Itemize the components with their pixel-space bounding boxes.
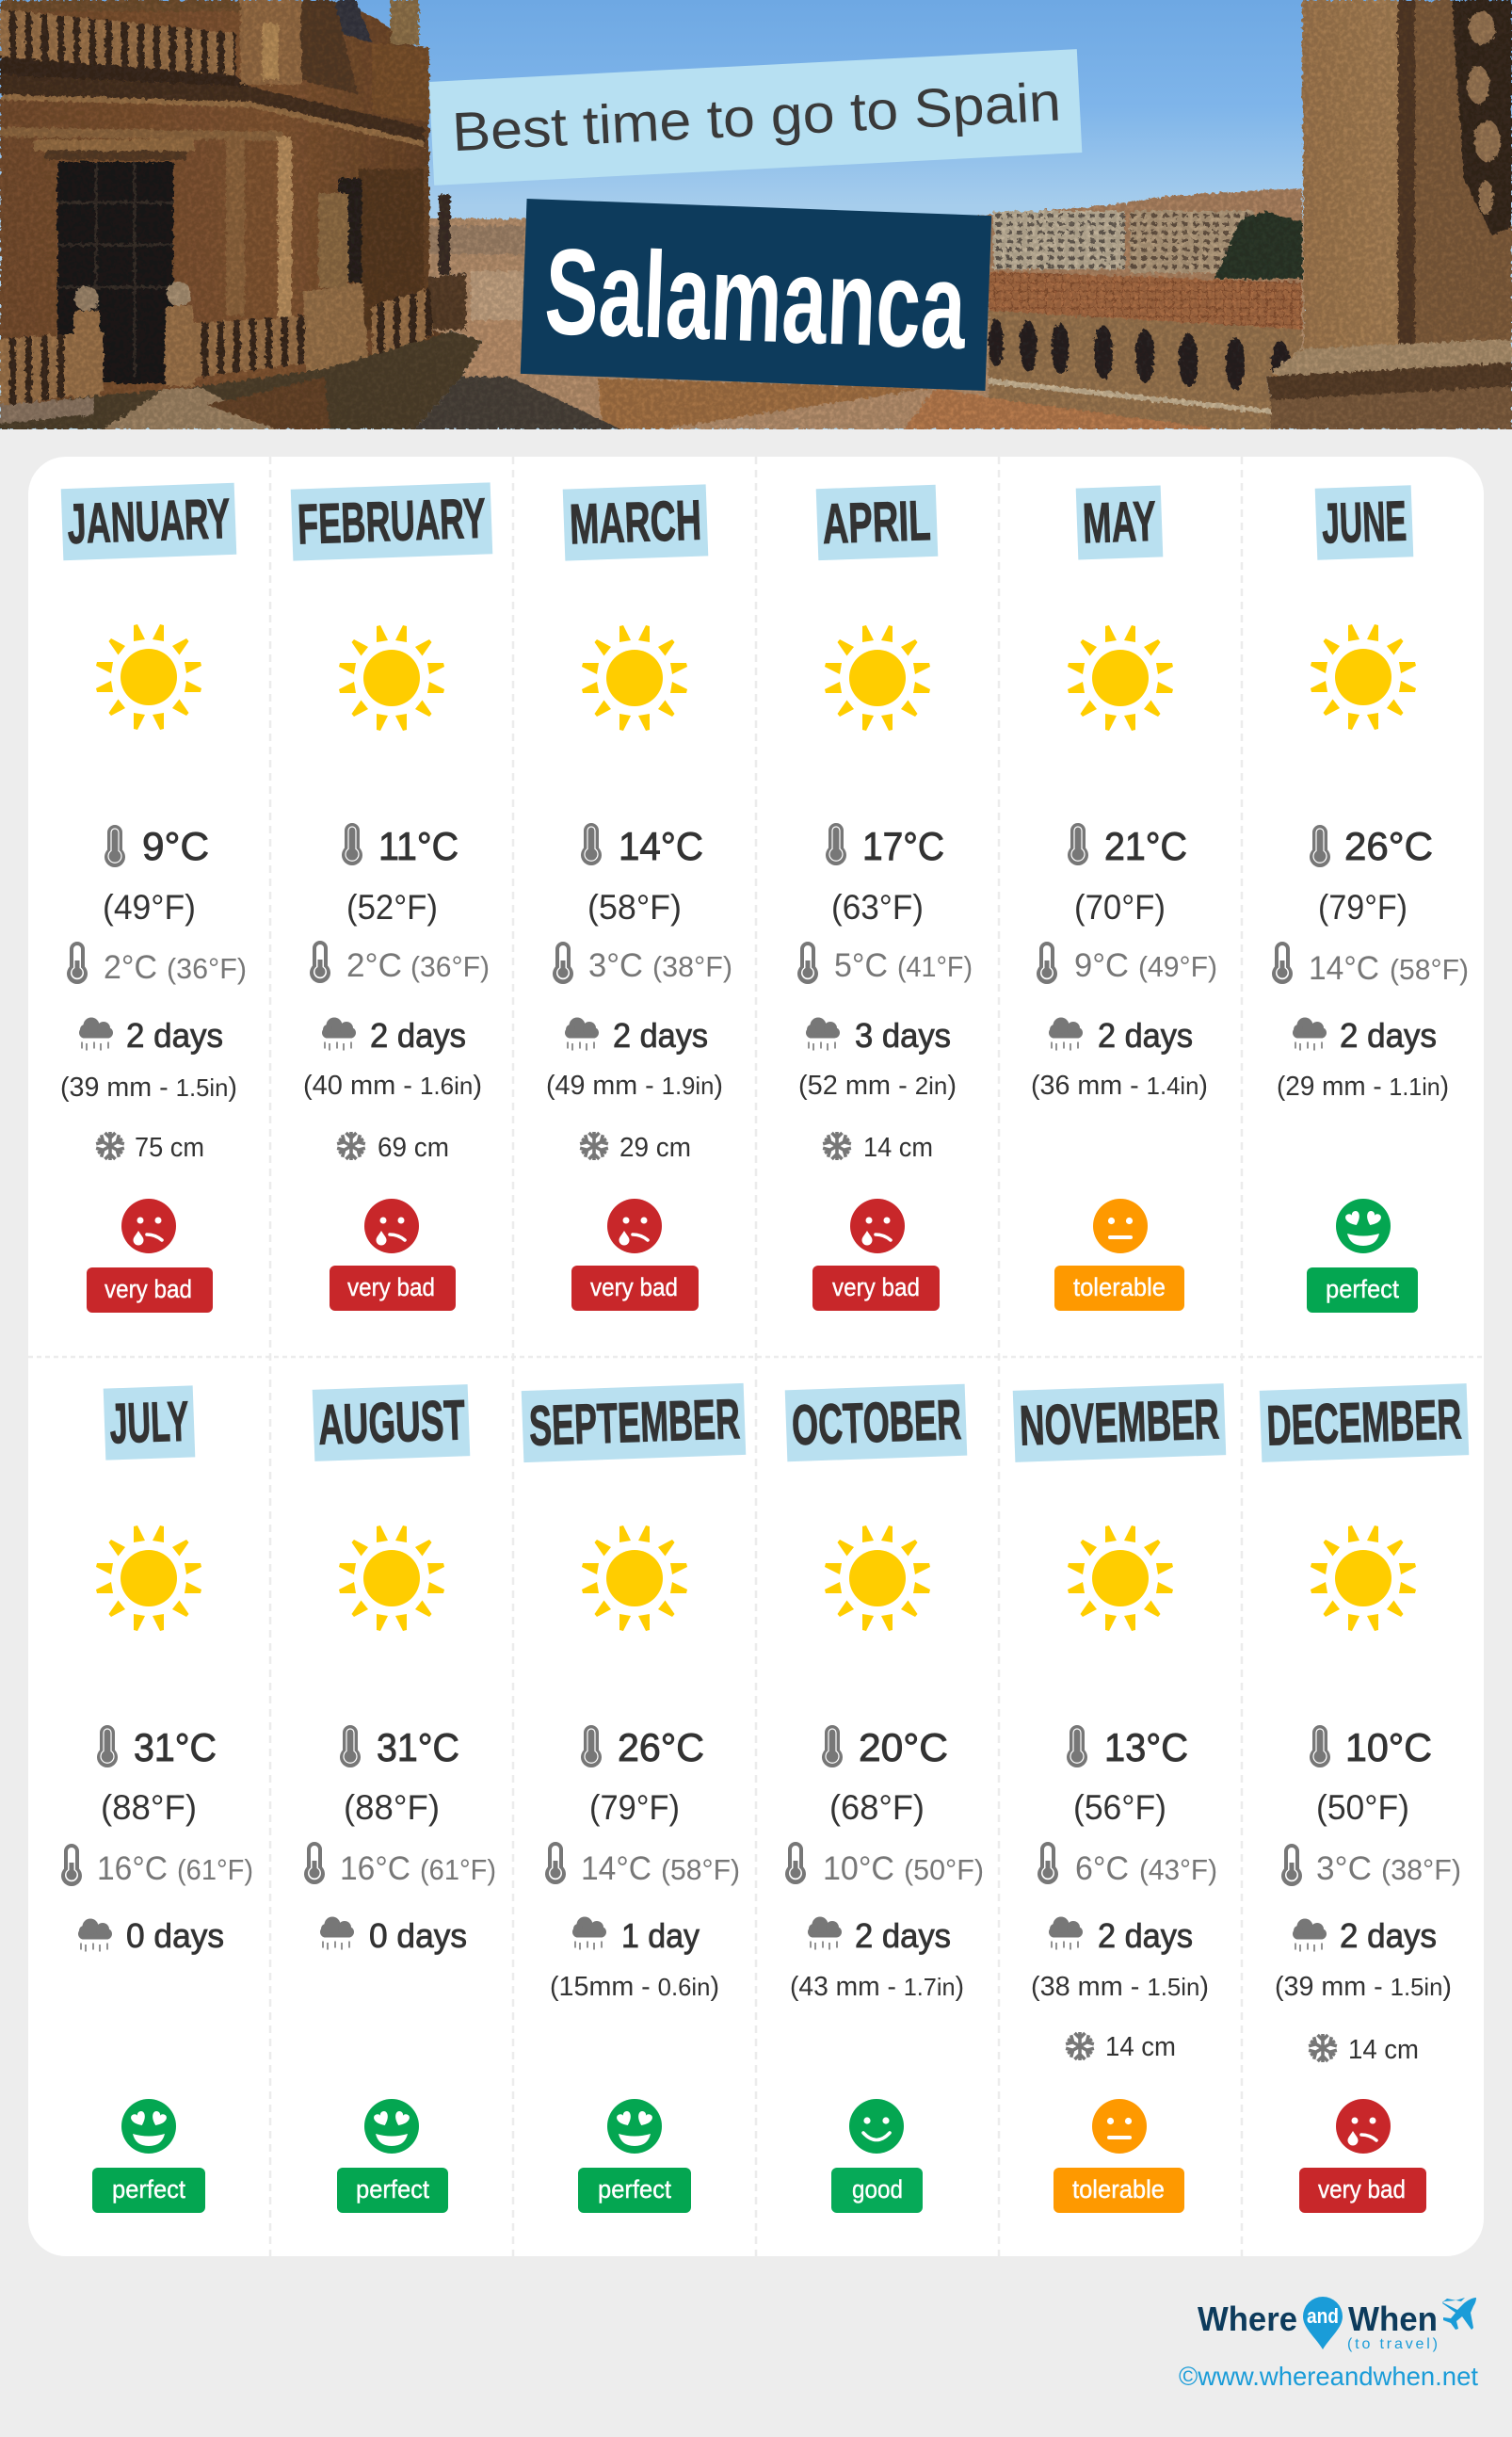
- rainfall: (40 mm - 1.6in): [303, 1071, 482, 1101]
- high temperature fahrenheit: (70°F): [1074, 888, 1166, 927]
- high temperature fahrenheit: (79°F): [1318, 888, 1407, 927]
- month heading: MARCH: [569, 489, 702, 556]
- month heading: OCTOBER: [791, 1388, 962, 1457]
- icon: low thermometer: [553, 942, 573, 984]
- icon: snowflake: [336, 1132, 366, 1160]
- icon: sun: [1068, 625, 1173, 731]
- rainy days: 2 days: [1098, 1016, 1193, 1055]
- high temperature fahrenheit: (56°F): [1073, 1788, 1166, 1827]
- icon: rain cloud: [572, 1917, 606, 1949]
- logo tagline: (to travel): [1347, 2336, 1438, 2352]
- icon: heart eyes face: [1336, 1199, 1391, 1253]
- low fahrenheit: (49°F): [1138, 950, 1217, 983]
- icon: sun: [825, 1525, 930, 1631]
- icon: sun: [582, 1525, 687, 1631]
- month heading: JUNE: [1321, 489, 1407, 556]
- low temperature: 3°C: [1316, 1850, 1372, 1887]
- high temperature: 14°C: [619, 824, 703, 868]
- rating badge: perfect: [1326, 1275, 1399, 1303]
- rainfall: (38 mm - 1.5in): [1031, 1972, 1209, 2002]
- low fahrenheit: (36°F): [167, 952, 247, 985]
- icon: low thermometer: [67, 942, 88, 984]
- icon: thermometer: [340, 1725, 361, 1767]
- icon: thermometer: [1310, 1725, 1330, 1767]
- rating badge: very bad: [832, 1273, 920, 1301]
- icon: heart eyes face: [121, 2099, 176, 2154]
- icon: heart eyes face: [364, 2099, 419, 2154]
- rating badge: very bad: [1318, 2175, 1406, 2203]
- month heading: [522, 1383, 746, 1462]
- rating badge: perfect: [356, 2175, 429, 2203]
- icon: sun: [825, 625, 930, 731]
- subtitle banner: [429, 49, 1082, 186]
- icon: rain cloud: [1293, 1919, 1327, 1951]
- month heading: JULY: [108, 1390, 190, 1455]
- high temperature: 9°C: [142, 824, 209, 868]
- icon: airplane: [1442, 2298, 1476, 2330]
- icon: low thermometer: [304, 1842, 325, 1884]
- rainfall: (36 mm - 1.4in): [1031, 1071, 1208, 1101]
- high temperature: 10°C: [1345, 1725, 1432, 1769]
- rating badge: [337, 2168, 448, 2213]
- rainy days: 2 days: [126, 1016, 223, 1055]
- low fahrenheit: (41°F): [897, 950, 973, 983]
- low temperature: 16°C: [97, 1850, 168, 1887]
- panel: October: [785, 1384, 984, 2213]
- icon: rain cloud: [1049, 1917, 1083, 1949]
- icon: crying face: [121, 1199, 176, 1253]
- month heading: AUGUST: [317, 1388, 466, 1457]
- icon: neutral face: [1093, 1199, 1148, 1253]
- rating badge: very bad: [590, 1273, 678, 1301]
- logo word: Where: Where: [1198, 2300, 1297, 2338]
- panel: June: [1272, 485, 1469, 1313]
- rating badge: [330, 1266, 456, 1311]
- month heading: SEPTEMBER: [528, 1387, 741, 1458]
- icon: thermometer: [105, 825, 125, 867]
- rainy days: 0 days: [126, 1916, 224, 1955]
- icon: snowflake: [1065, 2032, 1095, 2060]
- icon: thermometer: [342, 823, 362, 865]
- icon: low thermometer: [61, 1844, 82, 1886]
- snowfall: 75 cm: [135, 1133, 204, 1163]
- icon: heart eyes face: [607, 2099, 662, 2154]
- icon: crying face: [607, 1199, 662, 1253]
- rating badge: very bad: [105, 1275, 192, 1303]
- low fahrenheit: (58°F): [661, 1853, 740, 1886]
- low temperature: 6°C: [1075, 1850, 1129, 1887]
- month heading: [313, 1384, 470, 1461]
- icon: smiling face: [849, 2099, 904, 2154]
- month heading: [1076, 485, 1163, 560]
- rating badge: [571, 1266, 699, 1311]
- low fahrenheit: (43°F): [1139, 1853, 1217, 1886]
- icon: snowflake: [95, 1132, 125, 1160]
- panel: August: [304, 1384, 496, 2213]
- panel: May: [1031, 485, 1217, 1311]
- icon: neutral face: [1092, 2099, 1147, 2154]
- icon: sun: [96, 624, 201, 730]
- icon: low thermometer: [310, 941, 330, 983]
- month heading: FEBRUARY: [297, 487, 487, 556]
- low fahrenheit: (38°F): [1381, 1853, 1461, 1886]
- rainfall: (29 mm - 1.1in): [1277, 1072, 1449, 1102]
- icon: rain cloud: [320, 1917, 354, 1949]
- icon: sun: [582, 625, 687, 731]
- logo: Where and When: [1198, 2297, 1476, 2352]
- rainy days: 1 day: [621, 1916, 700, 1955]
- rainfall: (39 mm - 1.5in): [60, 1073, 237, 1103]
- rating badge: tolerable: [1072, 2175, 1165, 2203]
- white calendar card: [28, 457, 1484, 2256]
- rainfall: (15mm - 0.6in): [550, 1972, 719, 2002]
- high temperature: 26°C: [1344, 824, 1433, 868]
- high temperature: 26°C: [618, 1725, 704, 1769]
- low temperature: 5°C: [834, 947, 888, 984]
- rainy days: 2 days: [1340, 1016, 1437, 1055]
- title banner: Salamanca: [521, 199, 991, 391]
- rating badge: perfect: [598, 2175, 671, 2203]
- rating badge: perfect: [112, 2175, 185, 2203]
- rainy days: 2 days: [1098, 1916, 1193, 1955]
- high temperature fahrenheit: (68°F): [829, 1788, 925, 1827]
- high temperature: 13°C: [1104, 1725, 1188, 1769]
- icon: low thermometer: [545, 1842, 566, 1884]
- icon: rain cloud: [1049, 1017, 1083, 1051]
- low fahrenheit: (36°F): [410, 950, 490, 983]
- rainfall: (39 mm - 1.5in): [1275, 1972, 1452, 2002]
- subtitle banner: Best time to go to Spain: [451, 72, 1062, 163]
- low temperature: 2°C: [346, 947, 402, 984]
- low temperature: 3°C: [588, 947, 643, 984]
- snowfall: 14 cm: [1105, 2032, 1176, 2062]
- icon: rain cloud: [806, 1017, 840, 1051]
- high temperature: 11°C: [378, 824, 458, 868]
- icon: thermometer: [826, 823, 846, 865]
- rainy days: 0 days: [369, 1916, 467, 1955]
- rating badge: [92, 2168, 205, 2213]
- rainy days: 2 days: [370, 1016, 466, 1055]
- rainfall: (52 mm - 2in): [798, 1071, 957, 1101]
- rainy days: 2 days: [855, 1916, 951, 1955]
- snowfall: 14 cm: [863, 1133, 933, 1163]
- icon: sun: [339, 1525, 444, 1631]
- panel: December: [1260, 1383, 1469, 2213]
- rating badge: [87, 1267, 213, 1313]
- high temperature: 21°C: [1104, 824, 1187, 868]
- high temperature: 31°C: [134, 1725, 217, 1769]
- icon: thermometer: [581, 823, 602, 865]
- icon: sun: [1311, 624, 1416, 730]
- month heading: NOVEMBER: [1019, 1387, 1220, 1458]
- high temperature fahrenheit: (88°F): [344, 1788, 440, 1827]
- low temperature: 14°C: [1309, 950, 1379, 987]
- high temperature fahrenheit: (52°F): [346, 888, 438, 927]
- low fahrenheit: (58°F): [1390, 953, 1469, 986]
- icon: low thermometer: [785, 1842, 806, 1884]
- icon: sun: [1311, 1525, 1416, 1631]
- icon: low thermometer: [1272, 942, 1293, 984]
- icon: crying face: [364, 1199, 419, 1253]
- icon: rain cloud: [322, 1017, 356, 1051]
- title banner: Salamanca: Salamanca: [542, 222, 969, 375]
- icon: map pin with and: and: [1307, 2304, 1339, 2328]
- low fahrenheit: (38°F): [652, 950, 732, 983]
- low temperature: 16°C: [340, 1850, 410, 1887]
- panel: April: [797, 485, 973, 1311]
- snowfall: 69 cm: [378, 1133, 449, 1163]
- icon: sun: [339, 625, 444, 731]
- month heading: [1013, 1383, 1226, 1462]
- icon: crying face: [850, 1199, 905, 1253]
- rainy days: 2 days: [613, 1016, 708, 1055]
- month heading: JANUARY: [66, 487, 232, 556]
- snowfall: 29 cm: [619, 1133, 691, 1163]
- icon: thermometer: [1067, 1725, 1087, 1767]
- panel: March: [546, 484, 732, 1311]
- low temperature: 9°C: [1074, 947, 1129, 984]
- month heading: MAY: [1082, 490, 1157, 555]
- rating badge: [578, 2168, 691, 2213]
- high temperature fahrenheit: (79°F): [589, 1788, 680, 1827]
- rating badge: tolerable: [1073, 1273, 1166, 1301]
- hero photo: Salamanca rooftops: [0, 0, 1512, 429]
- month heading: APRIL: [821, 489, 932, 556]
- low fahrenheit: (61°F): [177, 1853, 253, 1886]
- icon: thermometer: [1310, 825, 1330, 867]
- rainfall: (43 mm - 1.7in): [790, 1972, 964, 2002]
- low fahrenheit: (50°F): [904, 1853, 984, 1886]
- low fahrenheit: (61°F): [420, 1853, 496, 1886]
- rating badge: very bad: [347, 1273, 435, 1301]
- month heading: [1315, 485, 1413, 560]
- icon: thermometer: [581, 1725, 602, 1767]
- icon: thermometer: [97, 1725, 118, 1767]
- high temperature fahrenheit: (58°F): [587, 888, 682, 927]
- icon: rain cloud: [808, 1917, 842, 1949]
- snowfall: 14 cm: [1348, 2035, 1419, 2065]
- panel: September: [522, 1383, 746, 2213]
- panel: November: [1013, 1383, 1226, 2213]
- website credit: ©www.whereandwhen.net: [1179, 2362, 1478, 2391]
- low temperature: 10°C: [823, 1850, 894, 1887]
- icon: thermometer: [822, 1725, 843, 1767]
- icon: low thermometer: [1037, 1842, 1058, 1884]
- icon: low thermometer: [1281, 1844, 1302, 1886]
- month heading: [291, 482, 492, 561]
- icon: low thermometer: [1037, 942, 1057, 984]
- icon: thermometer: [1068, 823, 1088, 865]
- panel: February: [291, 482, 492, 1311]
- icon: sun: [96, 1525, 201, 1631]
- logo word: When: When: [1348, 2300, 1438, 2338]
- high temperature fahrenheit: (50°F): [1316, 1788, 1409, 1827]
- high temperature: 20°C: [859, 1725, 948, 1769]
- rating badge: [1054, 1266, 1184, 1311]
- high temperature fahrenheit: (88°F): [101, 1788, 197, 1827]
- month heading: [785, 1384, 967, 1461]
- icon: snowflake: [1308, 2034, 1338, 2062]
- high temperature fahrenheit: (63°F): [831, 888, 924, 927]
- high temperature fahrenheit: (49°F): [103, 888, 196, 927]
- high temperature: 17°C: [862, 824, 944, 868]
- panel: July: [61, 1385, 253, 2213]
- high temperature: 31°C: [377, 1725, 459, 1769]
- icon: sun: [1068, 1525, 1173, 1631]
- icon: low thermometer: [797, 942, 818, 984]
- low temperature: 14°C: [581, 1850, 651, 1887]
- rainy days: 3 days: [855, 1016, 951, 1055]
- rainy days: 2 days: [1340, 1916, 1437, 1955]
- icon: snowflake: [822, 1132, 852, 1160]
- month heading: [61, 483, 236, 560]
- rating badge: [1307, 1267, 1418, 1313]
- month heading: [816, 485, 938, 560]
- rating badge: [1054, 2168, 1184, 2213]
- rating badge: [812, 1266, 940, 1311]
- icon: rain cloud: [78, 1919, 112, 1951]
- rainfall: (49 mm - 1.9in): [546, 1071, 723, 1101]
- icon: snowflake: [579, 1132, 609, 1160]
- icon: crying face: [1336, 2099, 1391, 2154]
- icon: rain cloud: [79, 1017, 113, 1051]
- icon: map pin with and: [1303, 2297, 1343, 2349]
- low temperature: 2°C: [104, 949, 157, 986]
- panel: January: [60, 483, 247, 1313]
- month heading: [104, 1385, 195, 1461]
- month heading: [563, 484, 708, 561]
- rating badge: good: [852, 2175, 903, 2203]
- rating badge: [831, 2168, 923, 2213]
- icon: rain cloud: [1293, 1017, 1327, 1051]
- rating badge: [1299, 2168, 1426, 2213]
- icon: rain cloud: [565, 1017, 599, 1051]
